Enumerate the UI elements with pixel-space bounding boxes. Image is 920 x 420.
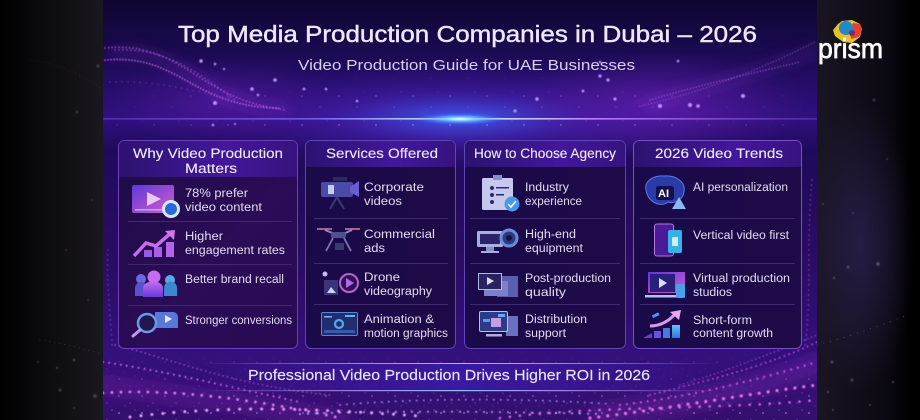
icon: audience [135,270,177,297]
panel heading: services offered [306,141,455,167]
text: short-form content growth: Short-form [693,315,752,327]
text: distribution support: support [525,328,567,340]
text: high-end equipment [525,229,584,255]
icon: drone videography [322,272,358,295]
text: animation and motion graphics: motion graphics [364,328,448,340]
panel: 2026 video trends [634,140,802,348]
text: stronger conversions: Stronger conversions [185,315,292,327]
text: AI personalization: AI personalization [693,182,788,194]
horizontal light flare [103,113,817,125]
text: distribution support [525,314,587,340]
bright star particles [199,59,745,126]
title: Top Media Production Companies in Dubai – 2026 [178,21,757,47]
text: corporate videos [364,182,424,208]
subtitle: Video Production Guide for UAE Businesses [298,57,635,74]
panel heading: how to choose agency [465,141,625,167]
panel heading: why video production matters [119,141,297,177]
panel: services offered [306,140,456,348]
text: industry experience: Industry [525,182,569,194]
text: 78% prefer video content: 78% prefer [185,188,248,200]
icon: drone [317,229,360,251]
text: better brand recall: Better brand recall [185,274,284,286]
icon: monitor and gear [477,230,517,253]
icon: distribution monitor [480,312,518,336]
text: short-form content growth [693,315,773,340]
bottom banner: Professional Video Production Drives Higher ROI in 2026 [248,368,650,384]
icon: virtual production laptop [645,272,685,298]
text: virtual production studios [693,273,790,299]
text: high-end equipment: High-end [525,229,576,241]
text: higher engagement rates: Higher [185,231,223,243]
left dark side strip [0,0,103,420]
icon: vertical phones [654,224,682,256]
icon: short-form growth [643,310,681,338]
text: virtual production studios: studios [693,287,732,299]
particle wave glow [103,50,817,420]
text: 78% prefer video content: video content [185,202,263,214]
text: animation and motion graphics [364,314,448,340]
icon: video screen [132,185,180,218]
icon: AI brain: AI [658,188,669,200]
panel heading: 2026 video trends: 2026 Video Trends [655,146,783,161]
icon: clipboard checklist [482,175,520,212]
text: drone videography: videography [364,286,432,298]
text: commercial ads: ads [364,243,385,255]
text: industry experience: experience [525,196,582,208]
panel heading: why video production matters: Matters [185,161,237,176]
icon: growth chart [134,230,175,257]
text: animation and motion graphics: Animation & [364,314,434,326]
text: corporate videos: Corporate [364,182,424,194]
text: short-form content growth: content growth [693,328,773,340]
text: distribution support: Distribution [525,314,587,326]
icon: magnifier and video pill [133,312,178,336]
logo: prism: prism [818,33,883,64]
panel heading: why video production matters: Why Video Production [133,146,283,161]
panel: how to choose agency [464,140,626,348]
panel heading: how to choose agency: How to Choose Agency [474,146,616,161]
text: corporate videos: videos [364,196,402,208]
text: higher engagement rates: engagement rates [185,245,285,257]
text: high-end equipment: equipment [525,243,584,255]
icon: AI brain [646,176,686,209]
text: virtual production studios: Virtual production [693,273,790,285]
text: drone videography: Drone [364,272,400,284]
panel heading: services offered: Services Offered [326,146,438,161]
text: higher engagement rates [185,231,285,257]
text: commercial ads [364,229,435,255]
particle waves [103,42,817,418]
main purple background [103,0,817,420]
text: drone videography [364,272,432,298]
text: post-production quality [525,273,611,299]
text: 78% prefer video content [185,188,263,214]
right dark side strip [805,0,920,420]
text: commercial ads: Commercial [364,229,435,241]
panel: why video production matters [118,140,298,348]
bottom banner [200,363,720,391]
text: post-production quality: Post-production [525,273,611,285]
icon: editing screens [478,274,518,297]
icon: video camera [321,177,359,209]
text: industry experience [525,182,582,208]
logo: prism [818,20,883,64]
text: post-production quality: quality [525,287,566,299]
text: vertical video first: Vertical video first [693,230,790,242]
icon: animation dashboard [322,312,358,336]
panel heading: 2026 video trends [634,141,801,167]
